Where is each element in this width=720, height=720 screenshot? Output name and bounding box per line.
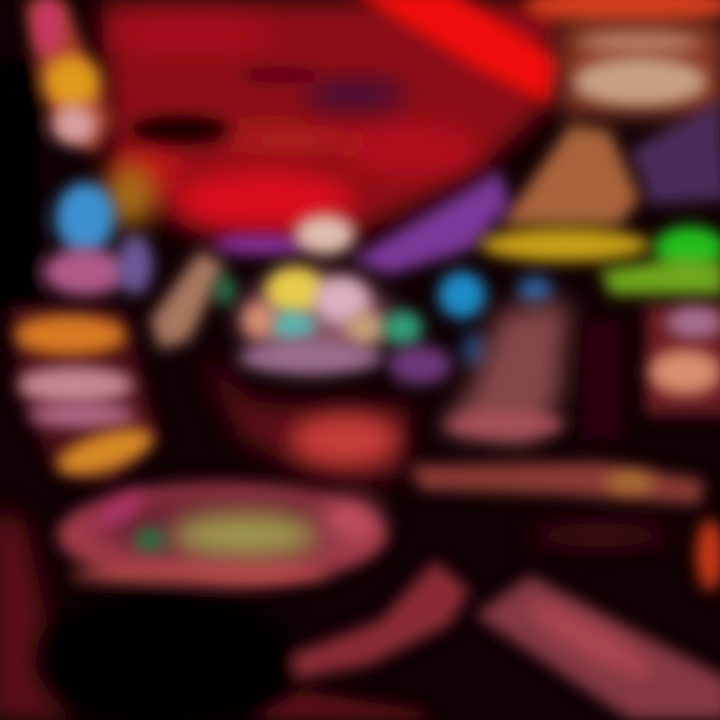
far right: beige glowing machine (645, 305, 720, 415)
bottom: red curved seat (290, 560, 470, 680)
left edge: dark column and lower red wall (0, 60, 70, 720)
left slot machine (10, 305, 160, 485)
left: sign colours (32, 0, 156, 227)
black table base (35, 590, 295, 720)
bottom right: pink striped ramp (250, 575, 720, 720)
top right: red band and beige face shape (525, 0, 720, 115)
right: yellow and green strip (480, 226, 720, 295)
centre: rainbow lights (215, 215, 452, 385)
centre: red pedestal (200, 350, 410, 480)
centre right: blue lights (438, 271, 553, 368)
right: slot chair (440, 300, 622, 445)
centre: purple beam (350, 170, 510, 275)
ceiling: red glow (100, 0, 560, 240)
left: coloured sign strips (25, 0, 112, 155)
roulette table (57, 483, 387, 587)
ceiling: bright red streak (350, 0, 560, 105)
left: pink and lilac glow (43, 235, 225, 350)
right: purple panel (630, 100, 720, 205)
right: long brown counter (410, 462, 720, 591)
right: tan triangle (500, 125, 640, 225)
left: blue light (55, 182, 115, 254)
